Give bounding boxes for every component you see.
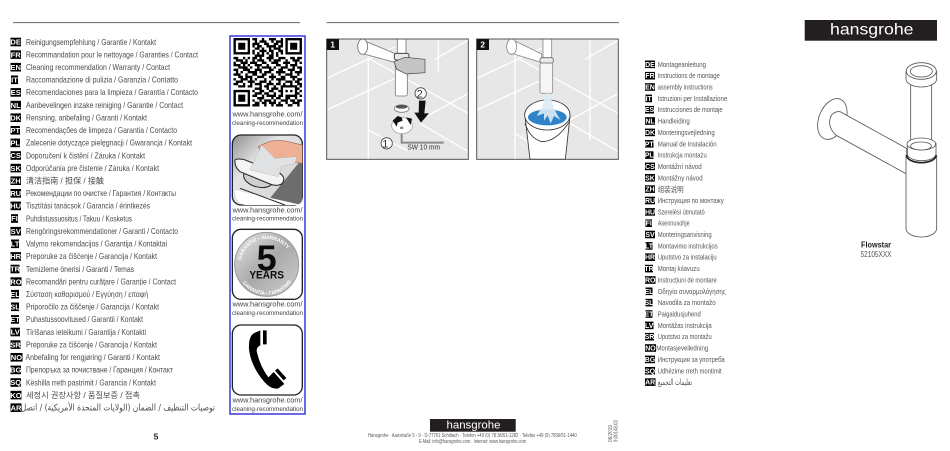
row PL: Instrukcja montażu: [658, 151, 707, 160]
row SK: [645, 173, 703, 182]
row SK: SK: [10, 164, 21, 173]
row FR: FR: [11, 50, 21, 59]
row SR: Preporuke za čišćenje / Garancija / Kontakt: [26, 340, 158, 349]
row ET: [645, 310, 701, 318]
row DE: Montageanleitung: [658, 60, 706, 69]
row DK: Monteringsvejledning: [658, 128, 715, 137]
card: 5 years warranty seal: YEARS: [249, 270, 284, 282]
row ZH: ZH: [645, 187, 655, 194]
row ET: ET: [10, 315, 20, 324]
row PL: [645, 151, 707, 160]
row IT: IT: [646, 96, 653, 103]
row EL: EL: [645, 289, 654, 296]
row FI: FI: [646, 221, 652, 228]
row EL: EL: [10, 290, 20, 299]
row IT: IT: [11, 76, 18, 85]
row PT: Manual de Instalación: [658, 139, 717, 148]
URL caption 4: [231, 396, 303, 413]
step number 2: 2: [480, 40, 485, 50]
URL caption 4: cleaning-recommendation: [232, 406, 303, 413]
footer logo: hansgrohe: [446, 420, 500, 432]
step number 1: [327, 39, 339, 50]
QR code: [234, 39, 302, 105]
URL caption 2: [231, 206, 303, 222]
row SQ: Udhëzime rreth montimit: [658, 366, 722, 375]
label 1: 1: [382, 138, 388, 150]
row FI: FI: [11, 214, 18, 223]
footer address: [368, 433, 577, 445]
row RU: Рекомендации по очистке / Гарантия / Контакты: [26, 189, 176, 198]
row AR: AR: [645, 380, 655, 387]
row CS: Montážní návod: [658, 162, 702, 171]
row NL: [645, 116, 690, 126]
print date and document number: 9.00148.03: [614, 420, 620, 442]
row FI: Asennusohje: [658, 219, 690, 228]
row SQ: SQ: [10, 378, 21, 387]
row RO: Recomandări pentru curățare / Garanție / Contact: [26, 277, 177, 286]
row BG: Препоръка за почистване / Гаранция / Контакт: [26, 366, 173, 375]
icon: trap cap: [394, 105, 409, 112]
row HU: Szerelési útmutató: [658, 207, 705, 216]
label 1: [381, 138, 392, 150]
row ZH: [645, 185, 684, 194]
row PL: Zalecenie dotyczące pielęgnacji / Gwarancja / Kontakt: [26, 139, 193, 148]
row IT: Istruzioni per Installazione: [658, 94, 727, 103]
water spray: [537, 93, 561, 123]
URL caption 3: www.hansgrohe.com/: [231, 300, 302, 308]
row ES: ES: [11, 88, 21, 97]
row SV: SV: [645, 232, 655, 239]
row NL: Handleiding: [658, 116, 690, 126]
row ES: Recomendaciones para la limpieza / Garantía / Contacto: [26, 88, 198, 97]
card: 5 years warranty seal: 5: [257, 238, 277, 279]
row EN: EN: [645, 84, 655, 92]
cleaning recommendation language list: [10, 38, 216, 413]
row SQ: SQ: [645, 368, 656, 375]
print date and document number: [608, 420, 620, 442]
row SL: Navodila za montažo: [658, 298, 716, 307]
row DE: Reinigungsempfehlung / Garantie / Kontakt: [26, 38, 157, 47]
row LV: Tīrīšanas ieteikumi / Garantija / Kontakti: [26, 328, 146, 337]
card: wiping the surface: [232, 135, 302, 205]
row SV: [645, 230, 712, 239]
row HU: HU: [645, 209, 655, 216]
arrow: rotate: [393, 116, 412, 127]
row LT: Valymo rekomendacijos / Garantija / Kontaktai: [26, 240, 167, 249]
row NO: Anbefaling for rengjøring / Garanti / Kontakt: [26, 353, 161, 362]
row LV: Montāžas instrukcija: [658, 321, 712, 330]
arrow: down: [414, 101, 429, 123]
row EL: Σύσταση καθαρισμού / Εγγύηση / επαφή: [26, 290, 148, 299]
row TR: [644, 264, 700, 273]
row RO: Instrucțiuni de montare: [658, 276, 717, 284]
top rule left: [13, 22, 300, 24]
row NO: Montasjeveiledning: [656, 344, 708, 352]
row IT: Raccomandazione di pulizia / Garanzia / Contatto: [26, 76, 178, 85]
footer logo: [430, 419, 516, 432]
row SR: [645, 332, 712, 341]
footer address: Hansgrohe · Auestraße 5 - 9 · D-77761 Schiltach · Telefon +49 (0) 78 36/51-1282 · Telefax +49 (0) 7836/51-1440: [368, 433, 577, 439]
row SV: SV: [11, 227, 22, 236]
row ZH: ZH: [11, 176, 21, 185]
row BG: BG: [10, 366, 21, 375]
row DK: DK: [645, 130, 655, 137]
product name: Flowstar: [861, 240, 892, 250]
row NO: NO: [645, 346, 656, 352]
row EN: Cleaning recommendation / Warranty / Contact: [26, 63, 171, 72]
row EN: assembly instructions: [658, 82, 713, 92]
row SR: SR: [10, 340, 21, 349]
URL caption 1: [231, 110, 303, 127]
card: 5 years warranty seal: [232, 228, 303, 300]
row CS: [645, 162, 702, 171]
row HR: HR: [10, 252, 22, 261]
row LT: LT: [11, 240, 20, 249]
row DE: DE: [645, 62, 655, 69]
icon: base with hex key: [392, 118, 444, 143]
row CS: CS: [10, 151, 21, 160]
step number 2: [477, 39, 489, 50]
URL caption 2: cleaning-recommendation: [232, 216, 303, 222]
row AR: تعليمات التجميع: [658, 376, 692, 387]
row AR: AR: [11, 403, 22, 412]
row SK: Odporúčania pre čistenie / Záruka / Kontakt: [26, 164, 160, 173]
URL caption 3: cleaning-recommendation: [232, 310, 303, 317]
hansgrohe logo top right: hansgrohe: [830, 22, 914, 38]
row ES: Instrucciones de montaje: [658, 105, 723, 114]
row LV: [645, 321, 712, 330]
row KO: 세정시 권장사항 / 품질보증 / 접촉: [26, 390, 140, 400]
row ET: Paigaldusjuhend: [658, 310, 701, 318]
row CS: CS: [645, 164, 655, 171]
step number 1: 1: [330, 40, 335, 50]
row BG: BG: [645, 357, 656, 364]
row SR: SR: [645, 334, 654, 341]
row RO: RO: [645, 278, 656, 284]
row RU: RU: [645, 198, 655, 205]
icon: hand: [394, 57, 425, 74]
URL caption 4: www.hansgrohe.com/: [231, 396, 302, 404]
row BG: Инструкция за употреба: [658, 355, 725, 364]
row FR: Recommandation pour le nettoyage / Garanties / Contact: [26, 50, 199, 59]
row ES: ES: [645, 107, 654, 114]
row SL: SL: [645, 300, 654, 307]
row FI: Puhdistussuositus / Takuu / Kosketus: [26, 214, 132, 223]
row EN: [645, 82, 713, 92]
row SL: Priporočilo za čiščenje / Garancija / Kontakt: [26, 303, 160, 312]
card: telephone contact: [232, 325, 302, 395]
hansgrohe logo top right: [805, 20, 937, 41]
row PT: PT: [645, 141, 654, 148]
page number: 5: [154, 432, 159, 442]
row HR: HR: [645, 255, 655, 262]
row DE: DE: [10, 38, 21, 47]
top rule middle: [326, 22, 619, 24]
row TR: TR: [10, 265, 21, 274]
print date and document number: 06/2019: [608, 425, 614, 442]
row LV: LV: [645, 323, 654, 330]
URL caption 1: www.hansgrohe.com/: [231, 110, 302, 118]
row NL: NL: [645, 118, 655, 126]
row HU: Tisztítási tanácsok / Garancia / érintkezés: [26, 202, 150, 211]
panel 2: flushing into bucket: [477, 39, 618, 159]
row SV: Monteringsanvisning: [658, 230, 712, 239]
row EL: Οδηγία συναρμολόγησης: [658, 287, 726, 296]
row FR: [645, 71, 720, 80]
assembly instructions language list: [644, 60, 727, 387]
URL caption 3: [231, 300, 303, 317]
label SW 10 mm: SW 10 mm: [407, 144, 440, 151]
row TR: Temizleme önerisi / Garanti / Temas: [26, 265, 134, 274]
row ZH: 组装说明: [658, 185, 684, 194]
row FR: Instructions de montage: [658, 71, 720, 80]
row HU: [645, 207, 705, 216]
product drawing: Flowstar siphon: [812, 63, 937, 237]
row DK: Rensning, anbefaling / Garanti / Kontakt: [26, 113, 148, 122]
row DE: [645, 60, 706, 69]
row SK: SK: [645, 175, 655, 182]
row LV: LV: [11, 328, 21, 337]
card: 5 years warranty seal: GARANTÍA • ГАРАНТИЯ: [243, 280, 291, 295]
URL caption 2: www.hansgrohe.com/: [231, 206, 302, 214]
URL caption 1: cleaning-recommendation: [232, 120, 303, 127]
row PL: PL: [645, 153, 654, 160]
row ZH: 清洁指南 / 担保 / 接触: [26, 176, 104, 186]
row PL: PL: [10, 139, 20, 148]
row AR: توصيات التنظيف / الضمان (الولايات المتحدة الأمريكية) / اتصل: [21, 402, 216, 413]
row FR: FR: [645, 73, 655, 80]
row SK: Montážny návod: [658, 173, 703, 182]
row HU: HU: [10, 202, 22, 211]
row SQ: Këshilla rreth pastrimit / Garancia / Kontakt: [26, 378, 157, 387]
row DK: DK: [10, 113, 22, 122]
row RO: RO: [10, 277, 22, 286]
row ET: ET: [645, 312, 654, 318]
article number: 52105XXX: [860, 249, 892, 259]
row HR: Preporuke za čišćenje / Garancija / Kontakt: [26, 252, 158, 261]
row TR: TR: [644, 266, 654, 273]
row HR: Uputstvo za instalaciju: [658, 253, 717, 262]
row SV: Rengöringsrekommendationer / Garanti / Contacto: [26, 227, 178, 236]
row RU: RU: [10, 189, 22, 198]
row NO: NO: [11, 353, 22, 362]
panel 1: removing the trap cap: [327, 39, 468, 159]
label 2: 2: [417, 88, 423, 100]
icon: bucket with water: [525, 100, 570, 159]
row RU: Инструкция по монтажу: [658, 196, 724, 205]
label 2: [415, 88, 426, 100]
row CS: Doporučení k čistění / Záruka / Kontakt: [26, 151, 146, 160]
row SL: SL: [10, 302, 20, 311]
row NL: Aanbevelingen inzake reiniging / Garantie / Contact: [26, 101, 184, 110]
row KO: KO: [10, 391, 22, 400]
row LT: Montavimo instrukcijos: [658, 241, 718, 250]
row ET: Puhastussoovitused / Garantii / Kontakt: [26, 315, 144, 324]
footer address: E-Mail: info@hansgrohe.com · Internet: www.hansgrohe.com: [419, 439, 526, 445]
row EN: EN: [10, 63, 21, 72]
row PT: Recomendações de limpeza / Garantia / Contacto: [26, 126, 177, 135]
row SR: Uputstvo za montažu: [658, 332, 712, 341]
row NL: NL: [11, 101, 21, 110]
blue frame: QR and service cards: [229, 35, 306, 415]
row LT: LT: [645, 243, 654, 250]
card: 5 years warranty seal: GARANTIE • WARRANTY: [238, 235, 290, 260]
row TR: Montaj kılavuzu: [658, 264, 700, 273]
row PT: PT: [10, 126, 20, 135]
row FI: [646, 219, 690, 228]
row RO: [645, 276, 717, 284]
